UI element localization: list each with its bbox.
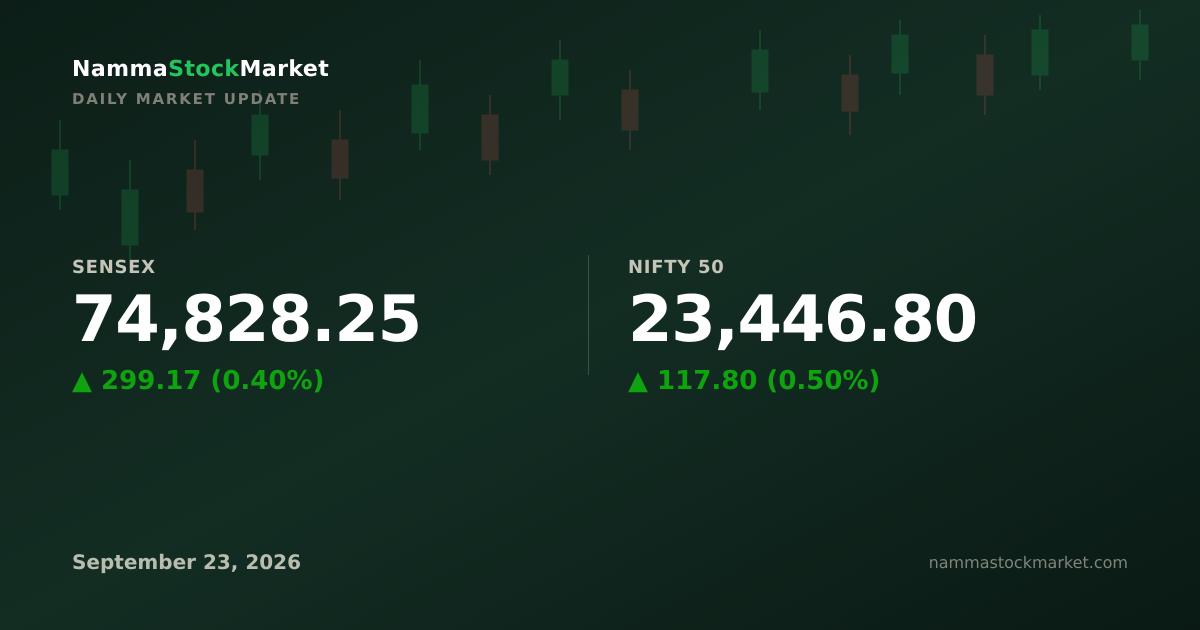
brand name: NammaStockMarket xyxy=(72,57,329,82)
nifty label: NIFTY 50 xyxy=(628,257,724,278)
subtitle: DAILY MARKET UPDATE xyxy=(72,90,301,108)
sensex value: 74,828.25 xyxy=(72,283,421,357)
nifty change: ▲ 117.80 (0.50%) xyxy=(628,366,880,396)
panel: nifty xyxy=(628,257,977,396)
nifty value: 23,446.80 xyxy=(628,283,977,357)
divider xyxy=(588,255,589,375)
panel: sensex xyxy=(72,257,421,396)
website: nammastockmarket.com xyxy=(929,553,1128,572)
sensex label: SENSEX xyxy=(72,257,156,278)
sensex change: ▲ 299.17 (0.40%) xyxy=(72,366,324,396)
date: September 23, 2026 xyxy=(72,550,301,574)
